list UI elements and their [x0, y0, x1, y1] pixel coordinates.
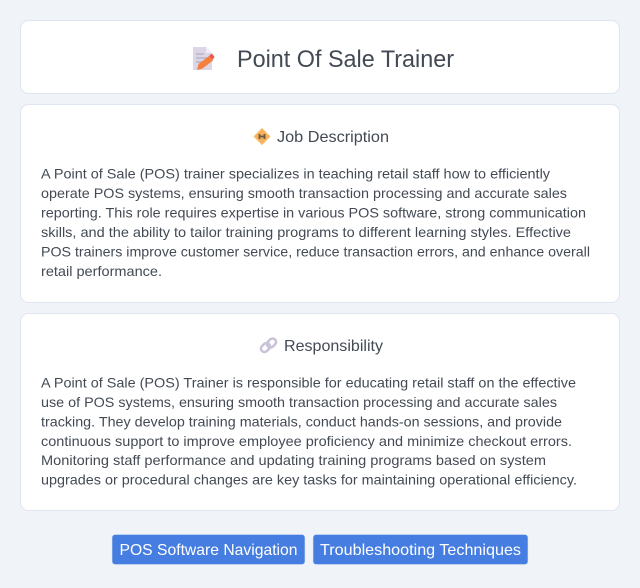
- text block: responsibility: A Point of Sale (POS) Trainer is responsible for educating retail staff on the effective: [41, 374, 576, 390]
- text block: job description: A Point of Sale (POS) trainer specializes in teaching retail staff how to efficiently: [41, 166, 550, 182]
- text block: job description: operate POS systems, ensuring smooth transaction processing and accurate sales: [41, 185, 567, 201]
- panel: responsibility: [20, 314, 620, 510]
- text block: job description: POS trainers improve customer service, reduce transaction errors, and enhance overall: [41, 244, 590, 260]
- icon: diamond road sign: [254, 128, 270, 144]
- text block: job description: retail performance.: [41, 263, 162, 279]
- tag: POS Software Navigation: [112, 534, 305, 564]
- heading: job description: Job Description: [277, 129, 389, 146]
- text block: responsibility: Monitoring staff performance and updating training programs based on system: [41, 452, 546, 468]
- heading: responsibility: Responsibility: [284, 338, 383, 355]
- text block: responsibility: use of POS systems, ensuring smooth transaction processing and accurate sales: [41, 394, 557, 410]
- panel: title card: [20, 20, 620, 94]
- text block: responsibility: continuous support to improve employee proficiency and minimize checkout errors.: [41, 433, 572, 449]
- text block: responsibility: tracking. They develop training materials, conduct hands-on sessions, and provide: [41, 414, 562, 430]
- text block: responsibility: upgrades or procedural changes are key tasks for maintaining operational efficiency.: [41, 472, 577, 488]
- tag: POS Software Navigation: POS Software Navigation: [120, 542, 298, 559]
- text block: job description: skills, and the ability to tailor training programs to different learning styles. Effective: [41, 224, 571, 240]
- text block: responsibility: [41, 374, 577, 488]
- icon: chain link: [259, 337, 278, 354]
- tag: Troubleshooting Techniques: [313, 534, 528, 564]
- tag: Troubleshooting Techniques: Troubleshooting Techniques: [320, 542, 521, 559]
- text block: job description: [41, 166, 590, 279]
- text block: job description: reporting. This role requires expertise in various POS software, strong communication: [41, 204, 586, 220]
- panel: job description: [20, 104, 620, 302]
- icon: document with pencil: [193, 47, 214, 70]
- title: Point Of Sale Trainer: [237, 46, 454, 73]
